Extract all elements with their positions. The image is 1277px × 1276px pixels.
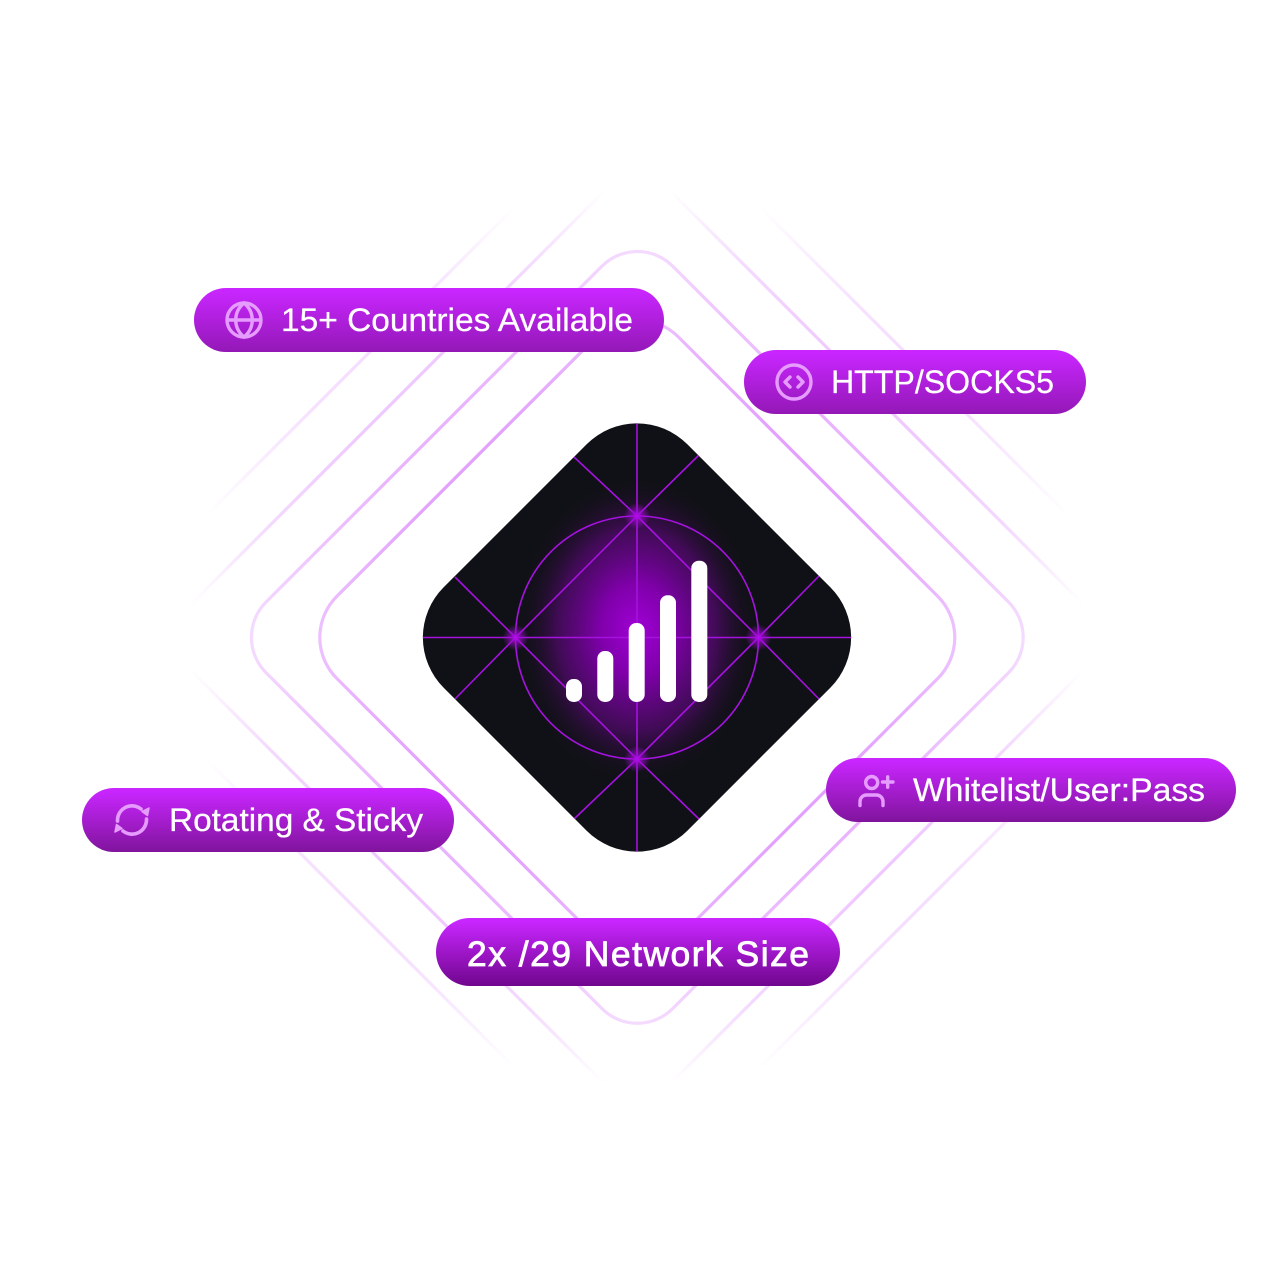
purple glow and grid lines xyxy=(420,420,855,855)
icon: rotate arrows xyxy=(115,806,149,834)
label: 2x /29 Network Size xyxy=(467,934,809,974)
diamond background xyxy=(393,394,881,881)
icon: signal bars xyxy=(566,561,707,702)
pill: HTTP/SOCKS5 xyxy=(744,350,1086,414)
label: HTTP/SOCKS5 xyxy=(831,364,1054,400)
label: Rotating & Sticky xyxy=(169,802,423,838)
infographic canvas xyxy=(82,208,1236,1066)
pill: Whitelist/User:Pass xyxy=(826,758,1236,822)
label: 15+ Countries Available xyxy=(281,302,633,338)
icon: code brackets xyxy=(777,365,811,399)
pill: 15+ Countries Available xyxy=(194,288,664,352)
central dark diamond emblem xyxy=(422,423,852,852)
label: Whitelist/User:Pass xyxy=(913,772,1205,808)
icon: globe xyxy=(227,303,261,337)
icon: add user xyxy=(860,776,893,806)
pill: 2x /29 Network Size xyxy=(436,918,840,986)
concentric diamond rings xyxy=(84,84,1190,1190)
pill: Rotating & Sticky xyxy=(82,788,454,852)
